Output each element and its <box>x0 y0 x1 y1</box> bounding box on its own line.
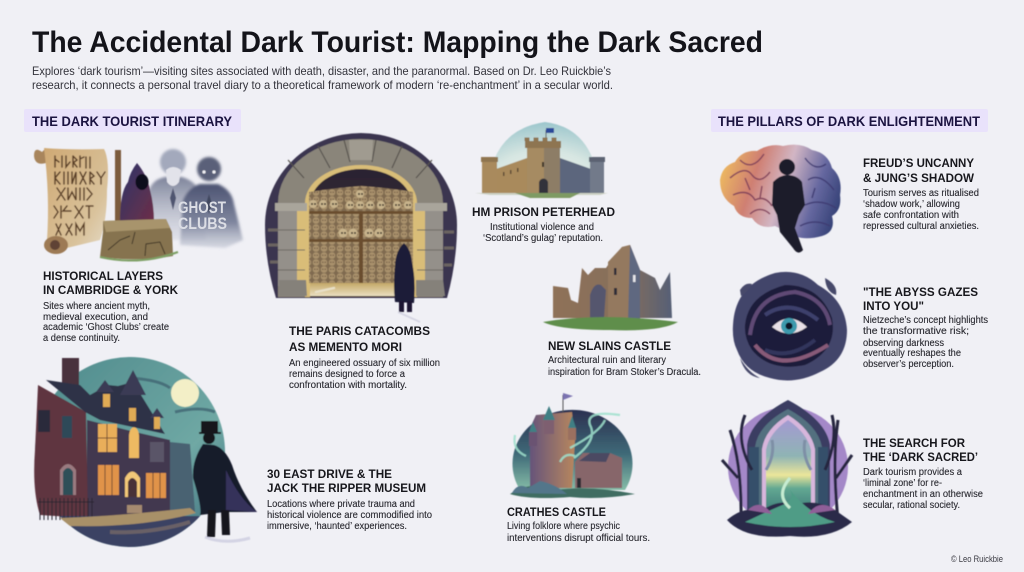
description <box>863 315 988 370</box>
description <box>548 355 701 378</box>
illustration: prison fortress <box>475 122 608 198</box>
panel: paris catacombs <box>265 133 457 391</box>
panel: crathes castle <box>507 393 650 544</box>
illustration: townhouses and caped figure <box>30 357 257 556</box>
description <box>267 499 433 532</box>
description: enchantment in an otherwise <box>863 489 984 500</box>
description: secular, rational society. <box>863 500 960 511</box>
heading <box>289 324 430 354</box>
description: ‘liminal zone’ for re- <box>863 478 942 489</box>
panel: hm prison peterhead <box>472 122 615 244</box>
panel: historical layers <box>34 148 243 344</box>
description: observer’s perception. <box>863 359 954 370</box>
description: remains designed to force a <box>289 369 406 380</box>
ghost clubs label <box>178 198 227 233</box>
heading: INTO YOU" <box>863 299 924 313</box>
heading: FREUD’S UNCANNY <box>863 156 975 170</box>
heading: 30 EAST DRIVE & THE <box>267 467 392 481</box>
section heading: itinerary <box>24 109 241 132</box>
heading: IN CAMBRIDGE & YORK <box>43 283 178 297</box>
heading: CRATHES CASTLE <box>507 505 606 519</box>
illustration: gothic portal <box>722 400 852 537</box>
panel: the abyss <box>733 272 988 380</box>
heading: AS MEMENTO MORI <box>289 340 402 354</box>
heading: THE PARIS CATACOMBS <box>289 324 430 338</box>
description: Dark tourism provides a <box>863 467 963 478</box>
description: confrontation with mortality. <box>289 380 407 391</box>
description: interventions disrupt official tours. <box>507 533 650 544</box>
description <box>863 467 984 511</box>
description: medieval execution, and <box>43 312 148 323</box>
description: repressed cultural anxieties. <box>863 221 979 232</box>
description: historical violence are commodified into <box>267 510 433 521</box>
description <box>289 358 440 391</box>
description: ‘shadow work,’ allowing <box>863 199 960 210</box>
intro text: research, it connects a personal travel diary to a theoretical framework of modern ‘re-enchantment’ in a secular world. <box>32 79 613 92</box>
section heading: itinerary: THE DARK TOURIST ITINERARY <box>32 113 233 129</box>
intro text: Explores ‘dark tourism’—visiting sites associated with death, disaster, and the paranormal. Based on Dr. Leo Ruickbie’s <box>32 65 611 78</box>
heading: JACK THE RIPPER MUSEUM <box>267 481 426 495</box>
description: eventually reshapes the <box>863 348 962 359</box>
panel: the dark sacred <box>722 400 984 537</box>
description: inspiration for Bram Stoker’s Dracula. <box>548 367 701 378</box>
heading <box>863 436 978 464</box>
heading: HISTORICAL LAYERS <box>43 269 163 283</box>
panel: new slains castle <box>543 245 701 378</box>
description <box>43 301 170 344</box>
ghost clubs label: CLUBS <box>178 214 227 233</box>
description: Nietzeche’s concept highlights <box>863 315 988 326</box>
description: the transformative risk; <box>863 326 969 337</box>
heading: & JUNG’S SHADOW <box>863 171 974 185</box>
heading: NEW SLAINS CASTLE <box>548 339 671 353</box>
illustration: catacomb arch with skulls <box>265 133 457 322</box>
description: observing darkness <box>863 338 944 349</box>
description: a dense continuity. <box>43 333 120 344</box>
illustration: haunted castle <box>510 393 635 498</box>
intro text <box>32 65 613 92</box>
copyright: © Leo Ruickbie <box>951 554 1003 564</box>
illustration: ruined castle <box>543 245 678 330</box>
heading <box>43 269 178 297</box>
heading: HM PRISON PETERHEAD <box>472 205 615 219</box>
description: Tourism serves as ritualised <box>863 188 979 199</box>
section heading: pillars: THE PILLARS OF DARK ENLIGHTENMENT <box>718 113 980 129</box>
heading <box>863 285 978 313</box>
illustration: swirling eye <box>733 272 847 380</box>
description: ‘Scotland’s gulag’ reputation. <box>483 233 603 244</box>
description: immersive, ‘haunted’ experiences. <box>267 521 407 532</box>
description <box>863 188 979 232</box>
panel: freud and jung <box>720 145 979 253</box>
description: academic ‘Ghost Clubs’ create <box>43 322 170 333</box>
description: Institutional violence and <box>490 222 594 233</box>
section heading: pillars <box>711 109 988 132</box>
description <box>507 521 650 544</box>
description: An engineered ossuary of six million <box>289 358 440 369</box>
heading: THE SEARCH FOR <box>863 436 965 450</box>
description: Sites where ancient myth, <box>43 301 150 312</box>
description <box>483 222 603 244</box>
heading <box>863 156 975 185</box>
panel: 30 east drive and ripper museum <box>30 357 433 556</box>
description: Locations where private trauma and <box>267 499 415 510</box>
illustration: scroll, hooded figure, ghost clubs <box>34 148 243 261</box>
heading: THE ‘DARK SACRED’ <box>863 450 978 464</box>
description: Living folklore where psychic <box>507 521 620 532</box>
description: Architectural ruin and literary <box>548 355 666 366</box>
ghost clubs label: GHOST <box>178 198 226 217</box>
heading <box>267 467 426 495</box>
heading: "THE ABYSS GAZES <box>863 285 978 299</box>
title: The Accidental Dark Tourist: Mapping the Dark Sacred <box>32 26 763 59</box>
description: safe confrontation with <box>863 210 959 221</box>
illustration: brain with silhouette <box>720 145 841 253</box>
